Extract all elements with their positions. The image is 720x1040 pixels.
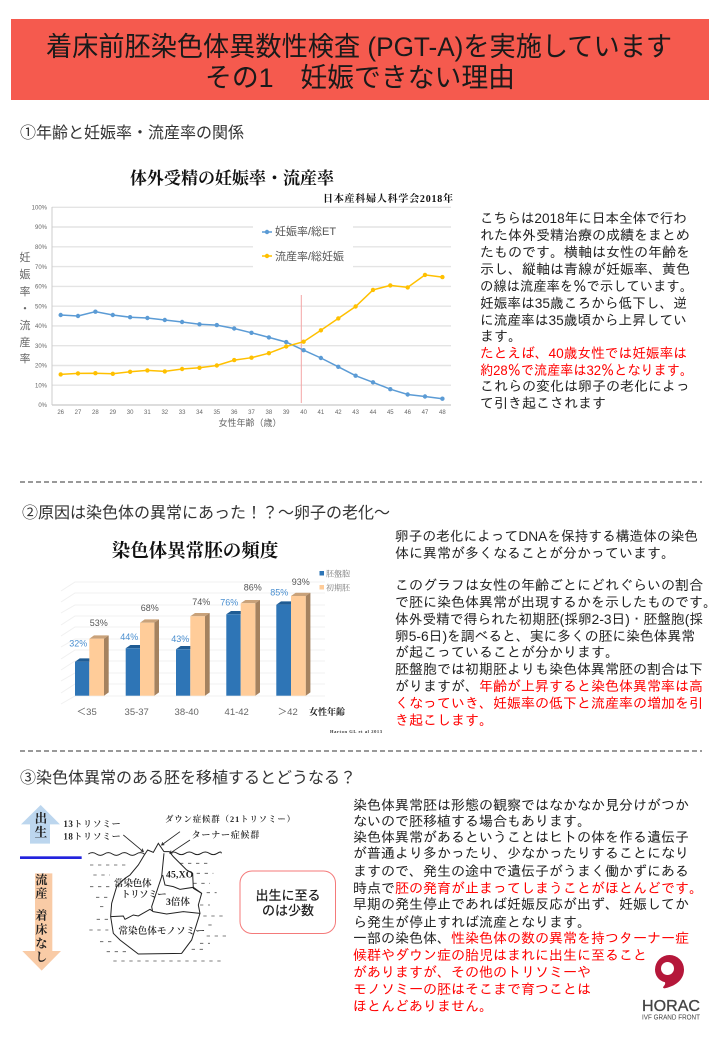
text block: section 2 explanation: がりますが、年齢が上昇すると染色体異常率は高 xyxy=(395,678,703,694)
heading: section 2: ②原因は染色体の異常にあった！？～卵子の老化～ xyxy=(22,504,390,522)
arrow: miscarriage, no implantation: 床 xyxy=(35,922,47,937)
y axis title xyxy=(20,250,30,365)
y axis tick labels: 60% xyxy=(35,284,48,290)
arrow: miscarriage, no implantation: 産 xyxy=(35,886,47,901)
blastocyst value labels xyxy=(69,588,288,648)
x axis tick labels: 31 xyxy=(144,410,151,416)
series: pregnancy rate xyxy=(58,310,445,401)
chart legend: 流産率/総妊娠 xyxy=(275,249,344,263)
text block: section 3 explanation: 一部の染色体、性染色体の数の異常を持つターナー症 xyxy=(353,930,689,946)
water line xyxy=(88,852,221,855)
age category labels: ＞42 xyxy=(278,707,298,718)
y axis tick labels: 30% xyxy=(35,344,48,350)
age category labels: 41-42 xyxy=(225,707,249,718)
text block: section 3 explanation: 染色体異常胚は形態の観察ではなかなか見分けがつか xyxy=(353,797,689,813)
text block: section 1 explanation: 約28％で流産率は32％となります。 xyxy=(480,362,693,378)
bars: 38-40 xyxy=(176,613,210,696)
chart legend: 妊娠率/総ET xyxy=(275,224,336,238)
y axis tick labels: 100% xyxy=(32,206,48,212)
x axis tick labels: 40 xyxy=(300,410,308,416)
y axis tick labels: 70% xyxy=(35,265,48,271)
x axis tick labels: 33 xyxy=(179,410,186,416)
text block: section 3 explanation: 早期の発生停止であれば妊娠反応が出ず、妊娠してか xyxy=(353,896,689,912)
text block: section 3 explanation: ほとんどありません。 xyxy=(353,998,493,1014)
early embryo value labels: 53% xyxy=(90,618,108,628)
text block: section 3 explanation xyxy=(353,797,703,1014)
blastocyst value labels: 43% xyxy=(171,634,189,644)
text block: section 3 explanation: ないので胚移植する場合もあります。 xyxy=(353,813,591,829)
early embryo value labels: 93% xyxy=(292,577,310,587)
x axis tick labels: 42 xyxy=(335,410,342,416)
text block: section 3 explanation: 染色体異常があるということはヒトの体を作る遺伝子 xyxy=(353,829,689,845)
blastocyst value labels: 85% xyxy=(270,588,288,598)
y axis title: 流 xyxy=(20,319,30,332)
arrow: birth: 生 xyxy=(35,826,48,840)
text block: section 1 explanation xyxy=(480,210,693,411)
early embryo value labels: 68% xyxy=(141,603,159,613)
chart source: 日本産科婦人科学会2018年 xyxy=(323,192,453,205)
text block: section 1 explanation: たものです。横軸は女性の年齢を xyxy=(480,244,690,260)
title banner: 着床前胚染色体異数性検査 (PGT-A)を実施しています xyxy=(46,32,672,62)
x axis tick labels: 30 xyxy=(127,410,134,416)
text block: section 2 explanation: で胚に染色体異常が出現するかを示したものです。 xyxy=(395,594,717,610)
bar chart legend: 胚盤胞 xyxy=(326,568,350,578)
x axis tick labels: 41 xyxy=(318,410,325,416)
labels: trisomy 13 and 18: 13トリソミー xyxy=(63,819,121,829)
callout: few reach birth: のは少数 xyxy=(262,903,314,918)
iceberg outline xyxy=(111,843,202,954)
arrow: birth: 出 xyxy=(35,810,47,825)
arrow: birth xyxy=(21,805,60,844)
blastocyst value labels: 76% xyxy=(220,598,238,608)
age category labels: 38-40 xyxy=(175,707,199,718)
callout: few reach birth: 出生に至る xyxy=(255,888,321,903)
text block: section 3 explanation: モノソミーの胚はそこまで育つことは xyxy=(353,981,591,997)
text block: section 3 explanation: 候群やダウン症の胎児はまれに出生に至ること xyxy=(353,947,647,963)
iceberg labels xyxy=(114,870,205,937)
pointer arrows xyxy=(123,832,190,853)
y axis tick labels: 80% xyxy=(35,245,48,251)
early embryo value labels: 86% xyxy=(244,582,262,592)
text block: section 3 explanation: ら発生が停止すれば流産となります。 xyxy=(353,914,591,930)
x axis title: 女性年齢（歳） xyxy=(218,417,282,428)
heading: section 3: ③染色体異常のある胚を移植するとどうなる？ xyxy=(20,769,356,787)
text block: section 1 explanation: 妊娠率は35歳ころから低下し、逆 xyxy=(480,295,687,311)
iceberg labels: 45,XO xyxy=(166,870,194,881)
text block: section 3 explanation: が普通より多かったり、少なかったりすることになり xyxy=(353,845,689,861)
y axis tick labels: 90% xyxy=(35,225,48,231)
text block: section 2 explanation: このグラフは女性の年齢ごとにどれぐらいの割合 xyxy=(395,577,703,593)
age category labels xyxy=(77,707,298,718)
x axis tick labels xyxy=(57,410,446,416)
line chart: pregnancy and miscarriage rate xyxy=(20,168,453,428)
x axis tick labels: 35 xyxy=(213,410,221,416)
x axis tick labels: 46 xyxy=(404,410,412,416)
x axis tick labels: 32 xyxy=(161,410,169,416)
text block: section 1 explanation: これらの変化は卵子の老化によっ xyxy=(480,378,690,394)
x axis tick labels: 43 xyxy=(352,410,360,416)
citation: Harton GL et al 2013 xyxy=(330,729,383,734)
text block: section 3 explanation: がありますが、その他のトリソミーや xyxy=(353,964,591,980)
text block: section 1 explanation: の線は流産率を％で示しています。 xyxy=(480,278,693,294)
arrow: miscarriage, no implantation: し xyxy=(35,950,47,964)
iceberg inner divisions xyxy=(111,853,202,919)
iceberg labels: トリソミー xyxy=(121,889,167,900)
series: miscarriage rate xyxy=(58,273,445,377)
labels: trisomy 13 and 18 xyxy=(63,819,121,842)
bar chart: abnormal embryo frequency xyxy=(61,540,383,734)
logo: HORAC: HORAC xyxy=(642,998,700,1015)
bars: 41-42 xyxy=(226,600,260,696)
bar chart legend: 初期胚 xyxy=(326,582,351,592)
x axis tick labels: 38 xyxy=(266,410,273,416)
text block: section 2 explanation: 体に異常が多くなることが分かっています。 xyxy=(395,545,675,561)
logo: HORAC xyxy=(642,955,701,1022)
callout: few reach birth xyxy=(240,871,336,934)
x axis tick labels: 44 xyxy=(370,410,377,416)
early embryo value labels: 74% xyxy=(192,597,210,607)
heading: section 1: ①年齢と妊娠率・流産率の関係 xyxy=(20,124,244,142)
label: Down syndrome: ダウン症候群（21トリソミー） xyxy=(165,814,295,824)
text block: section 1 explanation: たとえば、40歳女性では妊娠率は xyxy=(480,345,687,361)
y axis title: ・ xyxy=(20,303,30,315)
text block: section 2 explanation: くなっていき、妊娠率の低下と流産率の増加を引 xyxy=(395,695,703,711)
y axis tick labels: 50% xyxy=(35,304,48,310)
x axis tick labels: 34 xyxy=(196,410,203,416)
x axis title: 女性年齢 xyxy=(309,706,345,717)
text block: section 1 explanation: 示し、縦軸は青線が妊娠率、黄色 xyxy=(480,261,690,277)
age category labels: 35-37 xyxy=(125,707,149,718)
iceberg labels: 常染色体 xyxy=(114,878,152,890)
title banner xyxy=(11,19,709,100)
text block: section 1 explanation: れた体外受精治療の成績をまとめ xyxy=(480,227,690,243)
y axis title: 率 xyxy=(20,285,30,298)
y axis tick labels: 10% xyxy=(35,384,48,390)
surface line xyxy=(20,856,82,859)
x axis tick labels: 28 xyxy=(92,410,99,416)
diagram: iceberg of chromosomal abnormalities xyxy=(20,805,295,971)
y axis tick labels: 40% xyxy=(35,324,48,330)
bars: under 35 xyxy=(75,635,109,696)
x axis tick labels: 36 xyxy=(231,410,238,416)
text block: section 1 explanation: こちらは2018年に日本全体で行わ xyxy=(480,210,687,226)
age category labels: ＜35 xyxy=(77,707,97,718)
text block: section 1 explanation: ます。 xyxy=(480,328,522,344)
text block: section 3 explanation: ますので、発生の途中で遺伝子がうまく働かずにある xyxy=(353,863,689,879)
text block: section 1 explanation: て引き起こされます xyxy=(480,395,606,411)
y axis tick labels: 20% xyxy=(35,364,48,370)
water dashes xyxy=(89,863,227,961)
text block: section 2 explanation: き起こします。 xyxy=(395,712,493,728)
x axis tick labels: 45 xyxy=(387,410,394,416)
x axis tick labels: 47 xyxy=(422,410,429,416)
text block: section 2 explanation: 体外受精で得られた初期胚(採卵2-3日)・胚盤胞(採 xyxy=(395,611,703,627)
chart legend xyxy=(253,215,353,269)
bars: 35-37 xyxy=(126,619,159,696)
arrow: miscarriage, no implantation xyxy=(22,872,61,971)
y axis title: 率 xyxy=(20,352,30,365)
text block: section 3 explanation: 時点で胚の発育が止まってしまうことがほとんどです。 xyxy=(353,880,703,896)
arrow: miscarriage, no implantation: な xyxy=(35,937,47,951)
chart title: 体外受精の妊娠率・流産率 xyxy=(130,168,335,188)
early embryo value labels xyxy=(90,577,310,628)
x axis tick labels: 26 xyxy=(57,410,65,416)
y axis title: 娠 xyxy=(20,268,30,281)
bar chart title: 染色体異常胚の頻度 xyxy=(112,540,279,562)
blastocyst value labels: 44% xyxy=(120,632,138,642)
x axis tick labels: 37 xyxy=(248,410,255,416)
x axis tick labels: 48 xyxy=(439,410,446,416)
text block: section 1 explanation: に流産率は35歳頃から上昇してい xyxy=(480,312,687,328)
y axis title: 産 xyxy=(20,335,30,349)
title banner: その1 妊娠できない理由 xyxy=(205,63,515,93)
x axis tick labels: 27 xyxy=(75,410,82,416)
logo: HORAC: IVF GRAND FRONT xyxy=(642,1014,701,1022)
label: Turner syndrome: ターナー症候群 xyxy=(192,829,259,840)
y axis tick labels xyxy=(32,206,48,409)
arrow: miscarriage, no implantation: 流 xyxy=(35,872,48,887)
y axis title: 妊 xyxy=(20,250,30,264)
text block: section 2 explanation: が起こっていることが分かります。 xyxy=(395,644,619,660)
iceberg labels: 常染色体モノソミー xyxy=(118,925,205,937)
x axis tick labels: 29 xyxy=(109,410,117,416)
text block: section 2 explanation: 胚盤胞では初期胚よりも染色体異常胚の割合は下 xyxy=(395,661,703,677)
x axis tick labels: 39 xyxy=(283,410,290,416)
arrow: miscarriage, no implantation: 着 xyxy=(35,907,47,922)
iceberg labels: 3倍体 xyxy=(166,896,190,908)
bars: over 42 xyxy=(276,593,310,696)
marker: age 40 xyxy=(300,295,302,403)
text block: section 2 explanation: 卵子の老化によってDNAを保持する構造体の染色 xyxy=(395,528,698,544)
y axis tick labels: 0% xyxy=(38,403,48,409)
bar chart legend xyxy=(320,568,351,592)
labels: trisomy 13 and 18: 18トリソミー xyxy=(63,832,121,842)
text block: section 2 explanation xyxy=(395,528,717,728)
blastocyst value labels: 32% xyxy=(69,638,87,648)
text block: section 2 explanation: 卵5-6日)を調べると、実に多くの胚に染色体異常 xyxy=(395,628,695,644)
